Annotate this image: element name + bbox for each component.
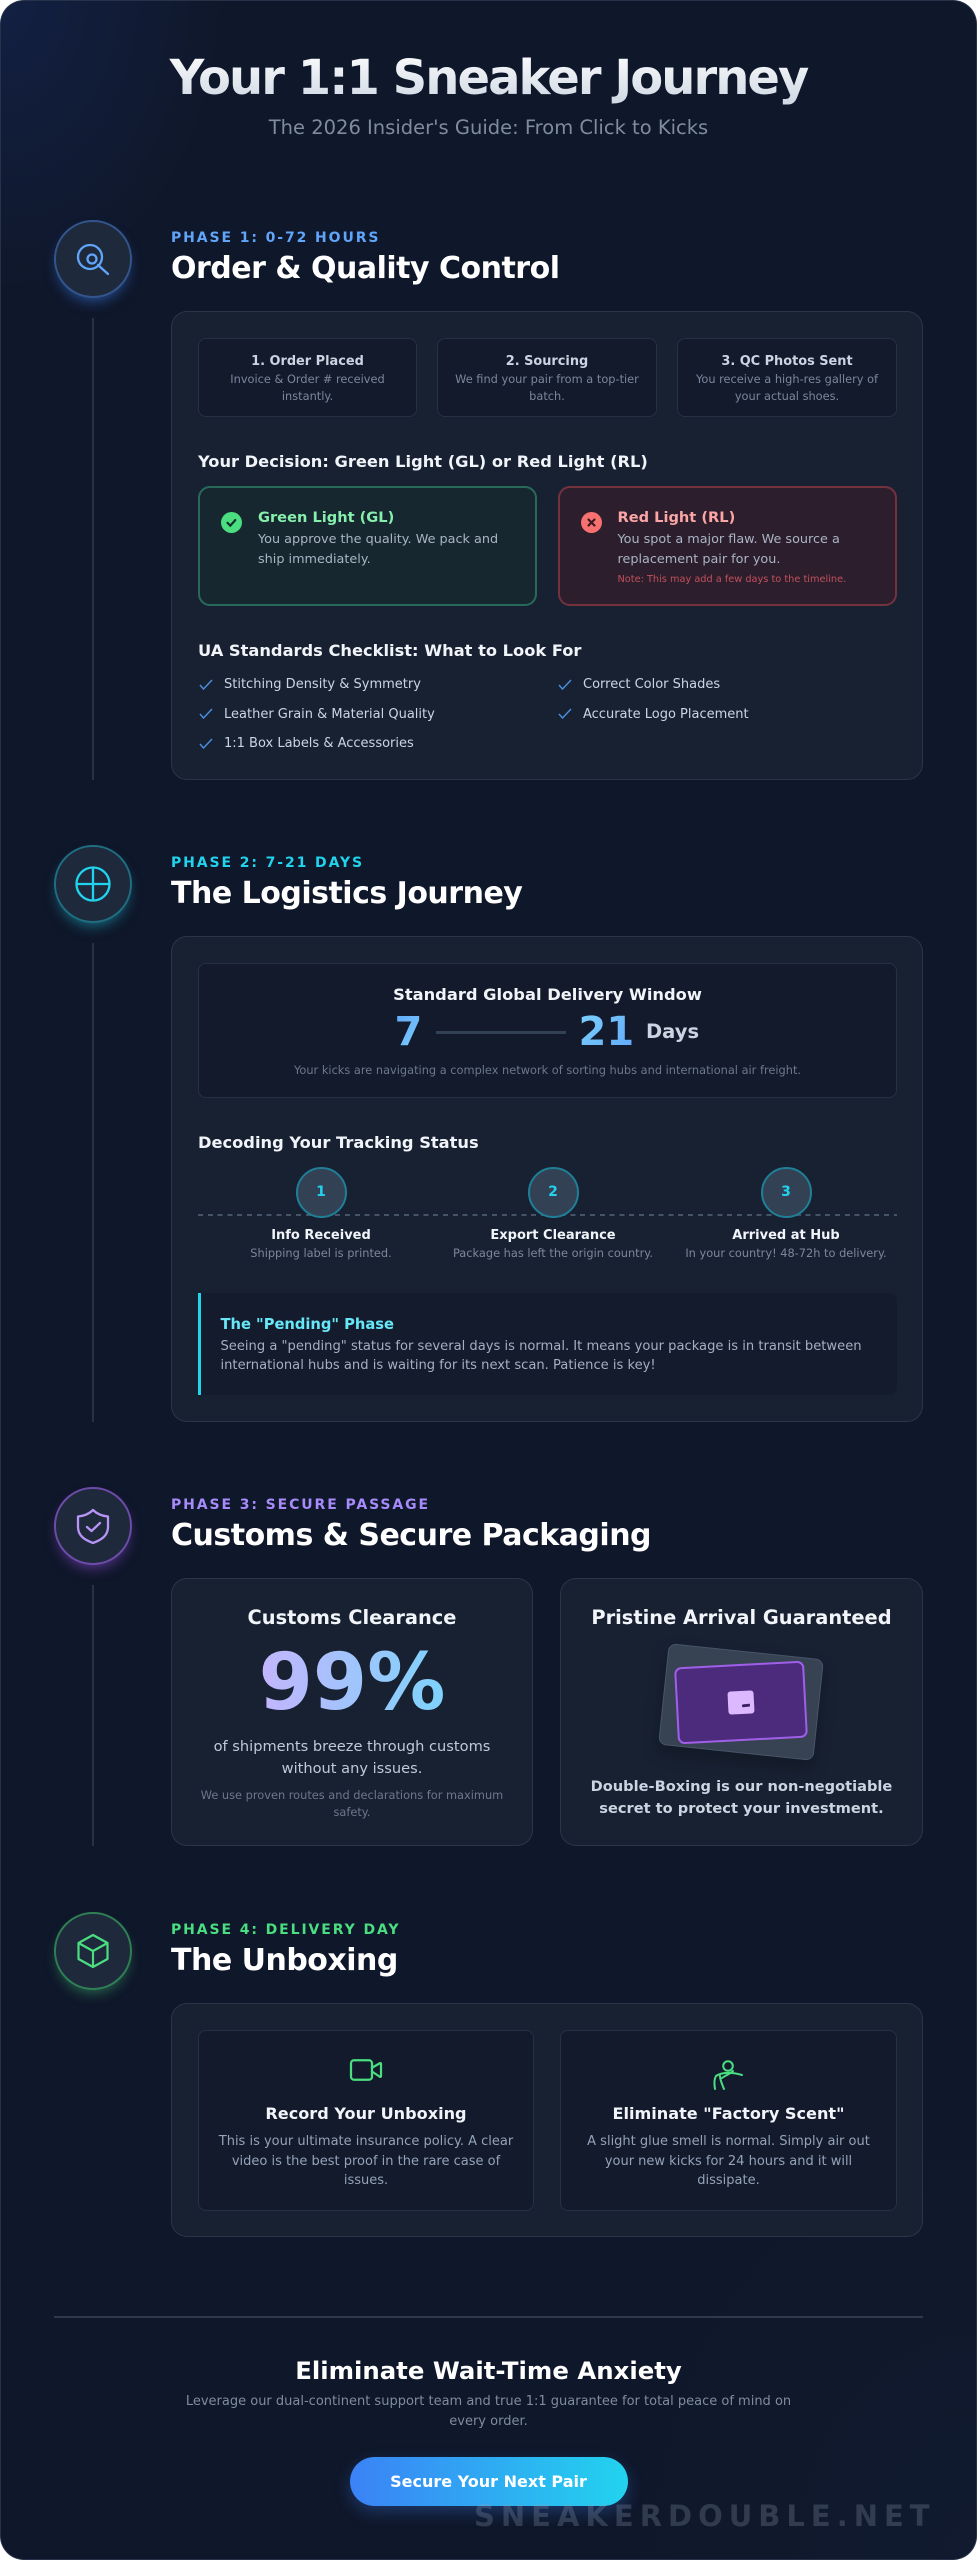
step: order placed: instantly. — [282, 388, 333, 402]
phase 1 heading: PHASE 1: 0-72 HOURS — [171, 230, 380, 246]
step: order placed — [198, 338, 417, 417]
delivery window: Days — [646, 1020, 699, 1043]
phase 1 heading: Order & Quality Control — [171, 251, 560, 286]
card: red light: replacement pair for you. — [618, 552, 780, 566]
panel: customs clearance — [171, 1578, 533, 1846]
tracking timeline: Export Clearance — [490, 1228, 616, 1243]
stat: 7 days: 7 — [394, 1009, 422, 1055]
panel: customs clearance: We use proven routes and declarations for maximum — [201, 1788, 503, 1802]
tracking timeline: In your country! 48-72h to delivery. — [685, 1246, 887, 1260]
tracking timeline: 1 — [316, 1184, 326, 1200]
stat: 99 percent: 99% — [259, 1638, 445, 1728]
card: red light: Red Light (RL) — [618, 509, 735, 526]
card: eliminate factory scent: A slight glue smell is normal. Simply air out — [587, 2134, 870, 2149]
card: red light — [558, 486, 897, 606]
phase 3 heading: Customs & Secure Packaging — [171, 1518, 651, 1553]
step: QC photos: 3. QC Photos Sent — [721, 354, 853, 369]
phase 1 heading — [171, 230, 560, 286]
tracking timeline — [198, 1167, 897, 1260]
timeline connector phase 3 — [92, 1585, 94, 1846]
text: call to action: every order. — [449, 2414, 528, 2428]
phase 3 heading: PHASE 3: SECURE PASSAGE — [171, 1497, 430, 1513]
step: QC photos: You receive a high-res gallery of — [696, 372, 878, 386]
card: eliminate factory scent: dissipate. — [697, 2173, 760, 2188]
panel: pristine arrival: secret to protect your investment. — [599, 1800, 884, 1817]
panel: customs clearance: without any issues. — [282, 1760, 422, 1777]
checklist: Correct Color Shades — [583, 677, 720, 692]
card: record your unboxing: video is the best proof in the rare case of — [232, 2154, 500, 2168]
card: red light: Note: This may add a few days to the timeline. — [618, 574, 846, 585]
delivery window: Your kicks are navigating a complex network of sorting hubs and international air freight. — [294, 1063, 801, 1077]
card: record your unboxing — [198, 2030, 534, 2211]
phase 4 heading — [171, 1922, 400, 1978]
watermark: SNEAKERDOUBLE.NET — [474, 2499, 936, 2533]
timeline connector phase 1 — [92, 318, 94, 780]
step: QC photos — [677, 338, 897, 417]
card: green light: ship immediately. — [258, 552, 371, 566]
button: secure your next pair: Secure Your Next Pair — [390, 2472, 587, 2491]
card: green light: Green Light (GL) — [258, 509, 394, 526]
card: record your unboxing: This is your ultimate insurance policy. A clear — [219, 2134, 513, 2149]
step: sourcing: batch. — [529, 388, 565, 402]
footer divider — [54, 2316, 923, 2318]
tracking timeline: 2 — [548, 1184, 558, 1200]
text: call to action — [186, 2394, 791, 2428]
card: green light — [198, 486, 537, 606]
icon: phase 2 globe — [54, 845, 132, 923]
callout: pending phase: The "Pending" Phase — [220, 1316, 394, 1333]
tracking timeline: Shipping label is printed. — [250, 1246, 392, 1260]
heading: decision: Your Decision: Green Light (GL) or Red Light (RL) — [198, 452, 648, 471]
panel: logistics — [171, 936, 923, 1422]
title: Your 1:1 Sneaker Journey — [170, 50, 807, 106]
button: secure your next pair — [350, 2457, 628, 2506]
icon: person airing out — [714, 2060, 743, 2090]
phase 4 heading: PHASE 4: DELIVERY DAY — [171, 1922, 400, 1938]
card: eliminate factory scent: your new kicks for 24 hours and it will — [605, 2154, 852, 2168]
heading: checklist: UA Standards Checklist: What to Look For — [198, 641, 581, 660]
text: call to action: Leverage our dual-continent support team and true 1:1 guarantee for total peace of mind on — [186, 2394, 791, 2409]
panel: pristine arrival — [560, 1578, 923, 1846]
step: order placed: 1. Order Placed — [251, 354, 364, 369]
delivery window — [198, 963, 897, 1098]
title — [0, 48, 977, 108]
timeline connector phase 2 — [92, 943, 94, 1422]
card: eliminate factory scent — [560, 2030, 897, 2211]
phase 2 heading: PHASE 2: 7-21 DAYS — [171, 855, 364, 871]
panel: customs clearance: Customs Clearance — [248, 1606, 456, 1628]
tracking timeline: Package has left the origin country. — [453, 1246, 653, 1260]
icon: phase 3 shield — [54, 1487, 132, 1565]
panel: pristine arrival: Pristine Arrival Guaranteed — [591, 1606, 892, 1628]
icon: red cross — [581, 512, 602, 533]
step: sourcing: We find your pair from a top-tier — [455, 372, 639, 386]
icon: phase 1 magnifier — [54, 220, 132, 298]
icon: green check — [221, 512, 242, 533]
subtitle: The 2026 Insider's Guide: From Click to Kicks — [269, 116, 708, 139]
checklist: Accurate Logo Placement — [583, 706, 749, 722]
icon: phase 4 cube — [54, 1912, 132, 1990]
phase 3 heading — [171, 1497, 651, 1553]
panel: customs clearance: safety. — [333, 1804, 371, 1818]
delivery window: Standard Global Delivery Window — [393, 985, 702, 1004]
checklist: Stitching Density & Symmetry — [224, 677, 421, 692]
card: green light: You approve the quality. We pack and — [258, 532, 498, 547]
tracking timeline: Arrived at Hub — [732, 1228, 840, 1243]
card: red light: You spot a major flaw. We source a — [618, 532, 840, 547]
phase 4 heading: The Unboxing — [171, 1943, 398, 1978]
step: sourcing — [437, 338, 657, 417]
stat: 21 days: 21 — [578, 1009, 634, 1055]
tracking timeline: 3 — [781, 1184, 791, 1200]
phase 2 heading: The Logistics Journey — [171, 876, 522, 911]
panel: order and quality control — [171, 311, 923, 780]
heading: call to action: Eliminate Wait-Time Anxiety — [295, 2356, 682, 2385]
step: QC photos: your actual shoes. — [735, 388, 839, 402]
callout: pending phase — [198, 1293, 897, 1395]
card: eliminate factory scent: Eliminate "Factory Scent" — [612, 2104, 845, 2123]
illustration: double box — [659, 1644, 824, 1764]
panel: unboxing — [171, 2003, 923, 2237]
step: order placed: Invoice & Order # received — [230, 372, 385, 386]
panel: customs clearance: of shipments breeze through customs — [214, 1738, 490, 1755]
tracking timeline: Info Received — [271, 1228, 371, 1243]
card: record your unboxing: Record Your Unboxing — [265, 2104, 467, 2123]
phase 2 heading — [171, 855, 522, 911]
checklist: Leather Grain & Material Quality — [224, 706, 435, 722]
checklist: 1:1 Box Labels & Accessories — [224, 736, 414, 751]
checklist — [200, 677, 749, 751]
heading: tracking: Decoding Your Tracking Status — [198, 1133, 479, 1152]
callout: pending phase: Seeing a "pending" status for several days is normal. It means your package is in transit between — [220, 1338, 862, 1354]
icon: video camera — [350, 2059, 382, 2081]
card: record your unboxing: issues. — [344, 2173, 388, 2188]
step: sourcing: 2. Sourcing — [506, 354, 588, 369]
callout: pending phase: international hubs and is waiting for its next scan. Patience is key! — [220, 1358, 656, 1373]
panel: pristine arrival: Double-Boxing is our non-negotiable — [591, 1778, 892, 1794]
